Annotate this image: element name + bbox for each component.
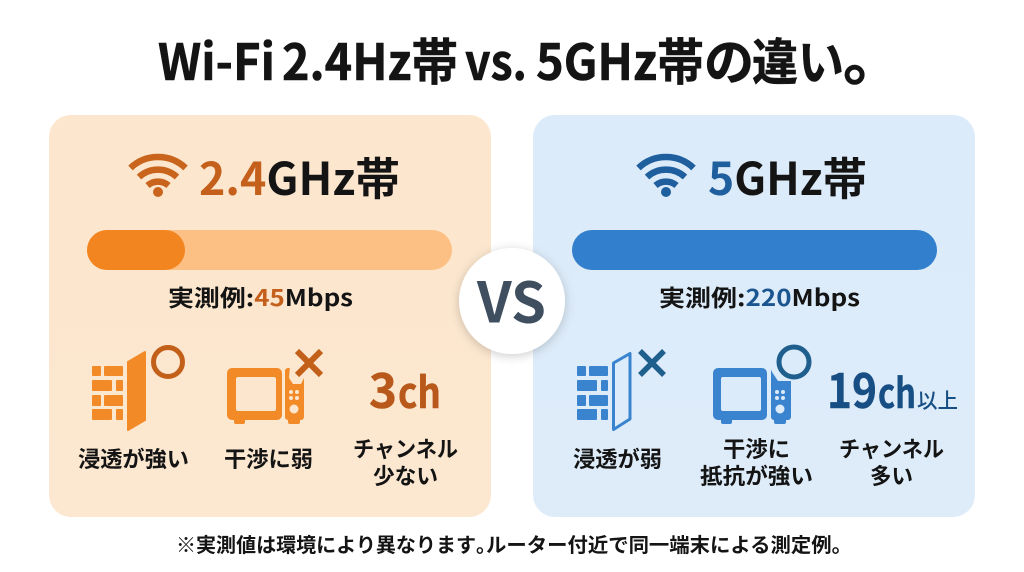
title: Wi-Fi <box>158 23 275 95</box>
footnote <box>176 529 852 558</box>
label: interference weak: 干渉に弱 <box>224 442 313 474</box>
label: few channels: 少ない <box>373 459 438 491</box>
title <box>158 11 903 98</box>
icon: wifi orange <box>130 157 186 197</box>
speed label: 実測例: 220Mbps <box>659 279 860 313</box>
panel background <box>49 115 491 517</box>
title: 。 <box>843 11 903 98</box>
stat: 19ch以上: 以上 <box>917 385 958 415</box>
speed label: 実測例: 45Mbps <box>168 279 353 313</box>
stat: 3ch <box>369 353 441 422</box>
panel background <box>533 115 975 517</box>
title: の <box>704 23 754 95</box>
panel: 2.4GHz band <box>49 115 491 517</box>
label: interference resistant: 抵抗が強い <box>700 459 813 491</box>
panel: 5GHz band <box>533 115 975 517</box>
label: many channels: チャンネル <box>839 432 944 464</box>
stat: 3ch: 3 <box>369 353 397 422</box>
icon: brick wall with solid door and circle <box>92 348 182 430</box>
footnote: 。 <box>476 529 496 558</box>
footnote: ※実測値は環境により異なります <box>176 529 476 558</box>
icon: wifi blue <box>638 157 694 197</box>
icon: microwave with cross <box>227 351 321 424</box>
label: many channels: 多い <box>870 459 913 491</box>
title: 違い <box>752 23 844 95</box>
icon: brick wall with thin door and cross <box>577 351 664 430</box>
label: penetration weak: 浸透が弱 <box>573 442 662 474</box>
label: many channels <box>839 432 944 491</box>
stat: 19ch以上: ch <box>878 360 916 420</box>
footnote: ルーター付近で同一端末による測定例。 <box>486 529 852 558</box>
title: 2.4Hz帯 <box>282 23 458 95</box>
label: interference resistant: 干渉に <box>723 432 790 464</box>
label: penetration strong: 浸透が強い <box>78 442 189 474</box>
VS badge: VS <box>476 258 546 340</box>
speed bar <box>87 230 452 270</box>
stat: 3ch: ch <box>398 359 441 421</box>
label: few channels <box>353 432 458 491</box>
heading: 5GHz帯: 5GHz帯 <box>708 143 867 208</box>
stat: 19ch以上 <box>827 353 958 422</box>
title: 5GHz帯 <box>536 23 704 95</box>
title: vs. <box>465 23 527 95</box>
stat: 19ch以上: 19 <box>827 353 877 422</box>
label: few channels: チャンネル <box>353 432 458 464</box>
VS badge <box>459 248 565 354</box>
heading: 2.4GHz帯: 2.4GHz帯 <box>199 143 400 208</box>
speed bar <box>572 230 937 270</box>
label: interference resistant <box>700 432 813 491</box>
icon: microwave with circle <box>713 347 809 424</box>
